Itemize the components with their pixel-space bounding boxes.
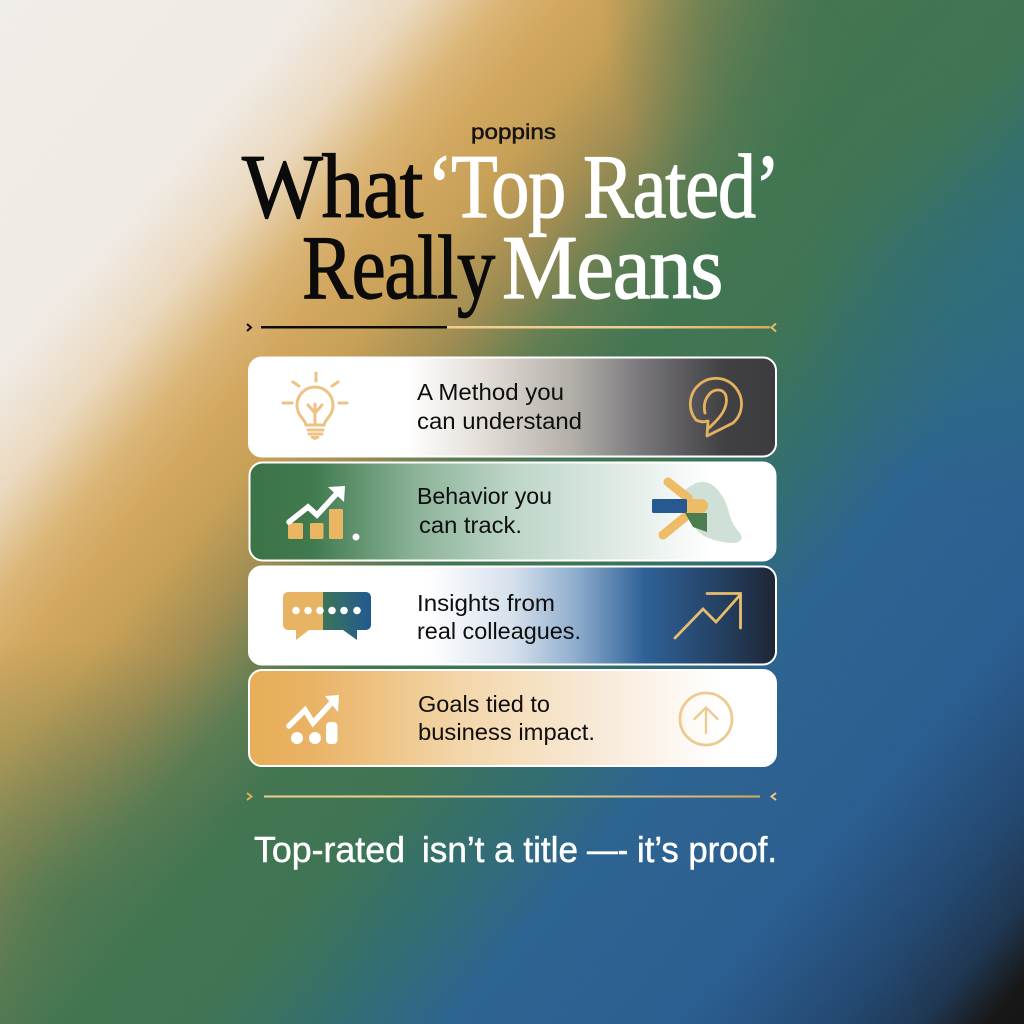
title — [242, 136, 779, 318]
text: behavior you can track: Behavior you — [417, 483, 552, 509]
icon: up arrow circle — [680, 693, 732, 745]
title: Really — [302, 217, 496, 318]
text: insights from real colleagues — [417, 590, 581, 644]
icon: trend arrow — [675, 594, 740, 638]
panel: behavior — [250, 462, 776, 560]
tagline: Top-rated — [254, 829, 405, 870]
text: goals tied to business impact: business impact. — [418, 719, 595, 745]
text: a method you can understand: can understand — [417, 408, 582, 434]
title: ‘Top Rated’ — [427, 136, 779, 237]
bottom divider — [247, 793, 776, 800]
icon: spiral speech bubble — [690, 378, 742, 436]
title: What — [242, 136, 423, 237]
brand label: poppins — [471, 121, 556, 144]
title: Means — [502, 217, 722, 318]
text: insights from real colleagues: Insights from — [417, 590, 555, 616]
tagline: it’s proof. — [637, 829, 777, 870]
panel: goals — [249, 670, 776, 766]
panel: method — [249, 358, 776, 456]
top divider — [247, 324, 776, 332]
icon: growth chart — [288, 486, 360, 540]
text: a method you can understand: A Method you — [417, 379, 564, 405]
icon: speech bubbles — [283, 592, 371, 640]
icon: light bulb — [283, 373, 347, 439]
text: goals tied to business impact — [418, 691, 595, 745]
text: insights from real colleagues: real colleagues. — [417, 618, 581, 644]
icon: growth dots — [289, 695, 339, 744]
text: behavior you can track: can track. — [419, 512, 522, 538]
tagline: —- — [587, 829, 628, 870]
panel: insights — [249, 566, 776, 664]
text: goals tied to business impact: Goals tied to — [418, 691, 550, 717]
text: behavior you can track — [417, 483, 552, 538]
tagline: isn’t a title — [422, 829, 578, 870]
tagline — [254, 829, 777, 870]
icon: crossed bars and leaf — [652, 482, 742, 543]
text: a method you can understand — [417, 379, 582, 434]
